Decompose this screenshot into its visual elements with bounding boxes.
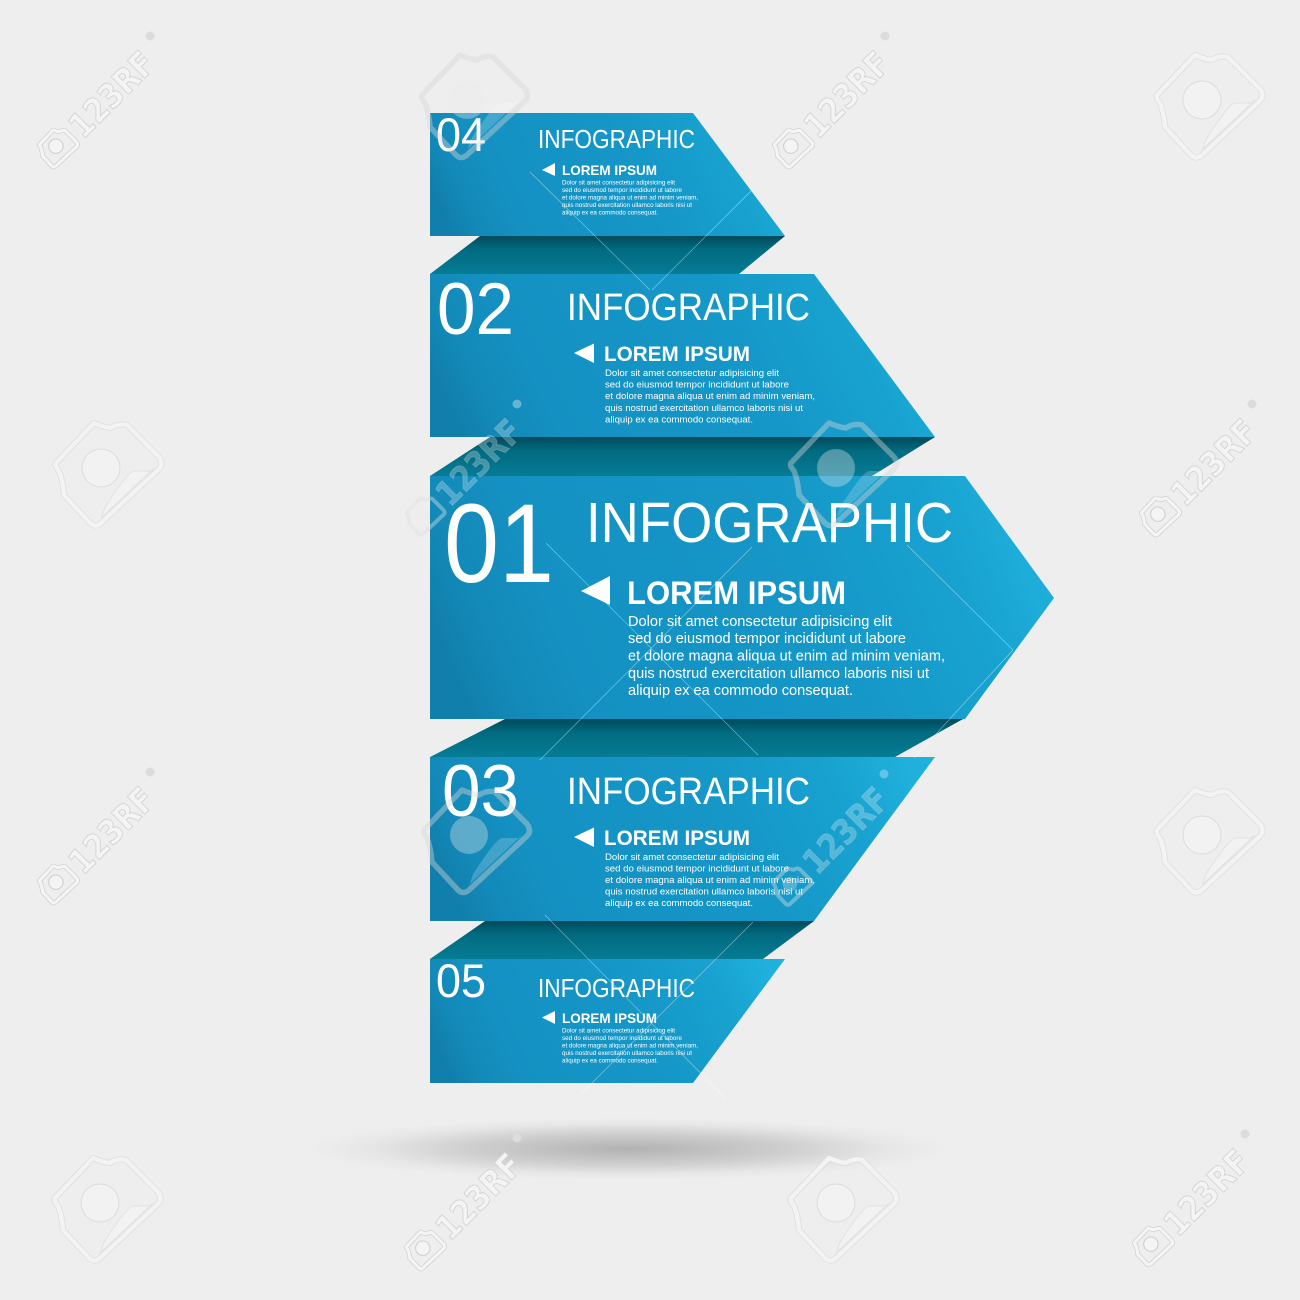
panel 01 subheading: LOREM IPSUM xyxy=(627,575,846,611)
watermark egg icon lower centre xyxy=(423,790,530,892)
panel 04 shape xyxy=(430,113,785,236)
watermark logo top middle xyxy=(774,32,899,167)
panel 05 number: 05 xyxy=(436,954,486,1007)
watermark logo middle centre: 123RF xyxy=(428,412,531,514)
panel 04 body text: sed do eiusmod tempor incididunt ut labore xyxy=(562,187,682,194)
panel 03 body text: sed do eiusmod tempor incididunt ut labore xyxy=(605,864,789,874)
watermark logo lower left: 123RF xyxy=(61,780,164,882)
panel 01 body text: et dolore magna aliqua ut enim ad minim veniam, xyxy=(628,648,945,664)
panel 05 body text: sed do eiusmod tempor incididunt ut labore xyxy=(562,1035,682,1042)
panel 01 body text: aliquip ex ea commodo consequat. xyxy=(628,683,853,699)
panel 01 xyxy=(430,476,1054,719)
panel 05 arrow icon xyxy=(542,1011,555,1024)
panel 05 body text: quis nostrud exercitation ullamco laboris nisi ut xyxy=(562,1050,692,1057)
watermark logo bottom centre xyxy=(406,1134,531,1269)
panel 01 arrow icon xyxy=(581,576,610,605)
panel 02 heading: INFOGRAPHIC xyxy=(567,287,810,329)
watermark logo top middle: 123RF xyxy=(796,44,899,146)
fold between panels 04 and 02 xyxy=(430,236,785,274)
panel 03 arrow icon xyxy=(574,828,594,847)
panel 01 body text: sed do eiusmod tempor incididunt ut labore xyxy=(628,631,906,647)
panel 03 body text: aliquip ex ea commodo consequat. xyxy=(605,898,753,909)
watermark egg icon bottom left xyxy=(54,1158,160,1260)
panel 02 arrow icon xyxy=(574,344,594,363)
panel 02 subheading: LOREM IPSUM xyxy=(604,343,750,366)
panel 04 arrow icon xyxy=(542,163,555,176)
watermark logo bottom right: 123RF xyxy=(1156,1142,1259,1244)
panel 01 body text: quis nostrud exercitation ullamco laboris nisi ut xyxy=(628,666,929,682)
panel 02 xyxy=(430,269,935,437)
ground shadow xyxy=(306,1118,950,1180)
watermark egg icon top centre xyxy=(421,55,528,158)
watermark logo bottom centre: 123RF xyxy=(428,1146,531,1248)
panel 02 shape xyxy=(430,274,935,437)
watermark logo top left: 123RF xyxy=(61,44,164,146)
watermark logo middle right: 123RF xyxy=(1163,412,1266,514)
panel 04 subheading: LOREM IPSUM xyxy=(562,162,657,178)
panel 02 body text: Dolor sit amet consectetur adipisicing elit xyxy=(605,368,779,379)
panel 02 body text: et dolore magna aliqua ut enim ad minim veniam, xyxy=(605,391,815,402)
panel 04 body text xyxy=(562,180,698,216)
watermark logo middle right xyxy=(1141,400,1266,535)
panel 04 body text: aliquip ex ea commodo consequat. xyxy=(562,210,658,216)
fold between panels 03 and 05 xyxy=(430,921,814,959)
panel 04 body text: quis nostrud exercitation ullamco laboris nisi ut xyxy=(562,202,692,209)
panel 04 body text: et dolore magna aliqua ut enim ad minim veniam, xyxy=(562,194,698,202)
panel 04 heading: INFOGRAPHIC xyxy=(538,124,695,154)
panel 01 shape xyxy=(430,476,1054,719)
panel 04 body text: Dolor sit amet consectetur adipisicing elit xyxy=(562,180,675,186)
watermark logo lower centre: 123RF xyxy=(795,780,898,882)
watermark egg icon lower right xyxy=(1156,790,1262,892)
panel 02 body text: aliquip ex ea commodo consequat. xyxy=(605,414,753,426)
panel 04 number: 04 xyxy=(436,108,486,161)
panel 05 body text: et dolore magna aliqua ut enim ad minim veniam, xyxy=(562,1042,698,1050)
panel 03 shape xyxy=(430,757,935,921)
panel 02 body text xyxy=(605,368,815,426)
panel 02 body text: sed do eiusmod tempor incididunt ut labore xyxy=(605,380,789,390)
watermark egg icon bottom centre xyxy=(790,1158,896,1260)
panel 04 xyxy=(430,108,785,236)
panel 03 body text: quis nostrud exercitation ullamco laboris nisi ut xyxy=(605,886,803,898)
panel 03 xyxy=(430,751,935,921)
fold between panels 01 and 03 xyxy=(430,719,963,757)
watermark logo middle centre xyxy=(406,400,531,535)
watermark logo bottom right xyxy=(1134,1130,1259,1265)
panel 01 heading: INFOGRAPHIC xyxy=(586,491,953,555)
panel 03 subheading: LOREM IPSUM xyxy=(604,827,750,850)
watermark egg icon top right xyxy=(1156,55,1262,158)
panel 05 xyxy=(430,954,785,1083)
panel 05 subheading: LOREM IPSUM xyxy=(562,1010,657,1026)
panel 02 body text: quis nostrud exercitation ullamco laboris nisi ut xyxy=(605,403,803,414)
panel 05 shape xyxy=(430,959,785,1083)
fold between panels 02 and 01 xyxy=(430,437,935,476)
watermark egg icon middle centre xyxy=(790,423,896,526)
watermark logo top left xyxy=(39,32,164,167)
panel 03 heading: INFOGRAPHIC xyxy=(567,771,810,813)
watermark logo lower left xyxy=(39,768,164,903)
panel 03 body text: et dolore magna aliqua ut enim ad minim veniam, xyxy=(605,875,815,886)
panel 01 body text xyxy=(628,614,945,699)
panel 05 body text xyxy=(562,1028,698,1064)
watermark logo lower centre xyxy=(773,770,898,905)
panel 05 heading: INFOGRAPHIC xyxy=(538,973,695,1003)
panel 03 body text xyxy=(605,852,815,909)
panel 02 number: 02 xyxy=(437,269,514,350)
panel 03 body text: Dolor sit amet consectetur adipisicing elit xyxy=(605,852,779,863)
panel 05 body text: Dolor sit amet consectetur adipisicing elit xyxy=(562,1028,675,1034)
watermark egg icon middle left xyxy=(55,423,161,526)
panel 05 body text: aliquip ex ea commodo consequat. xyxy=(562,1058,658,1064)
panel 03 number: 03 xyxy=(442,751,519,832)
panel 01 body text: Dolor sit amet consectetur adipisicing elit xyxy=(628,614,892,630)
panel 01 number: 01 xyxy=(444,481,554,606)
